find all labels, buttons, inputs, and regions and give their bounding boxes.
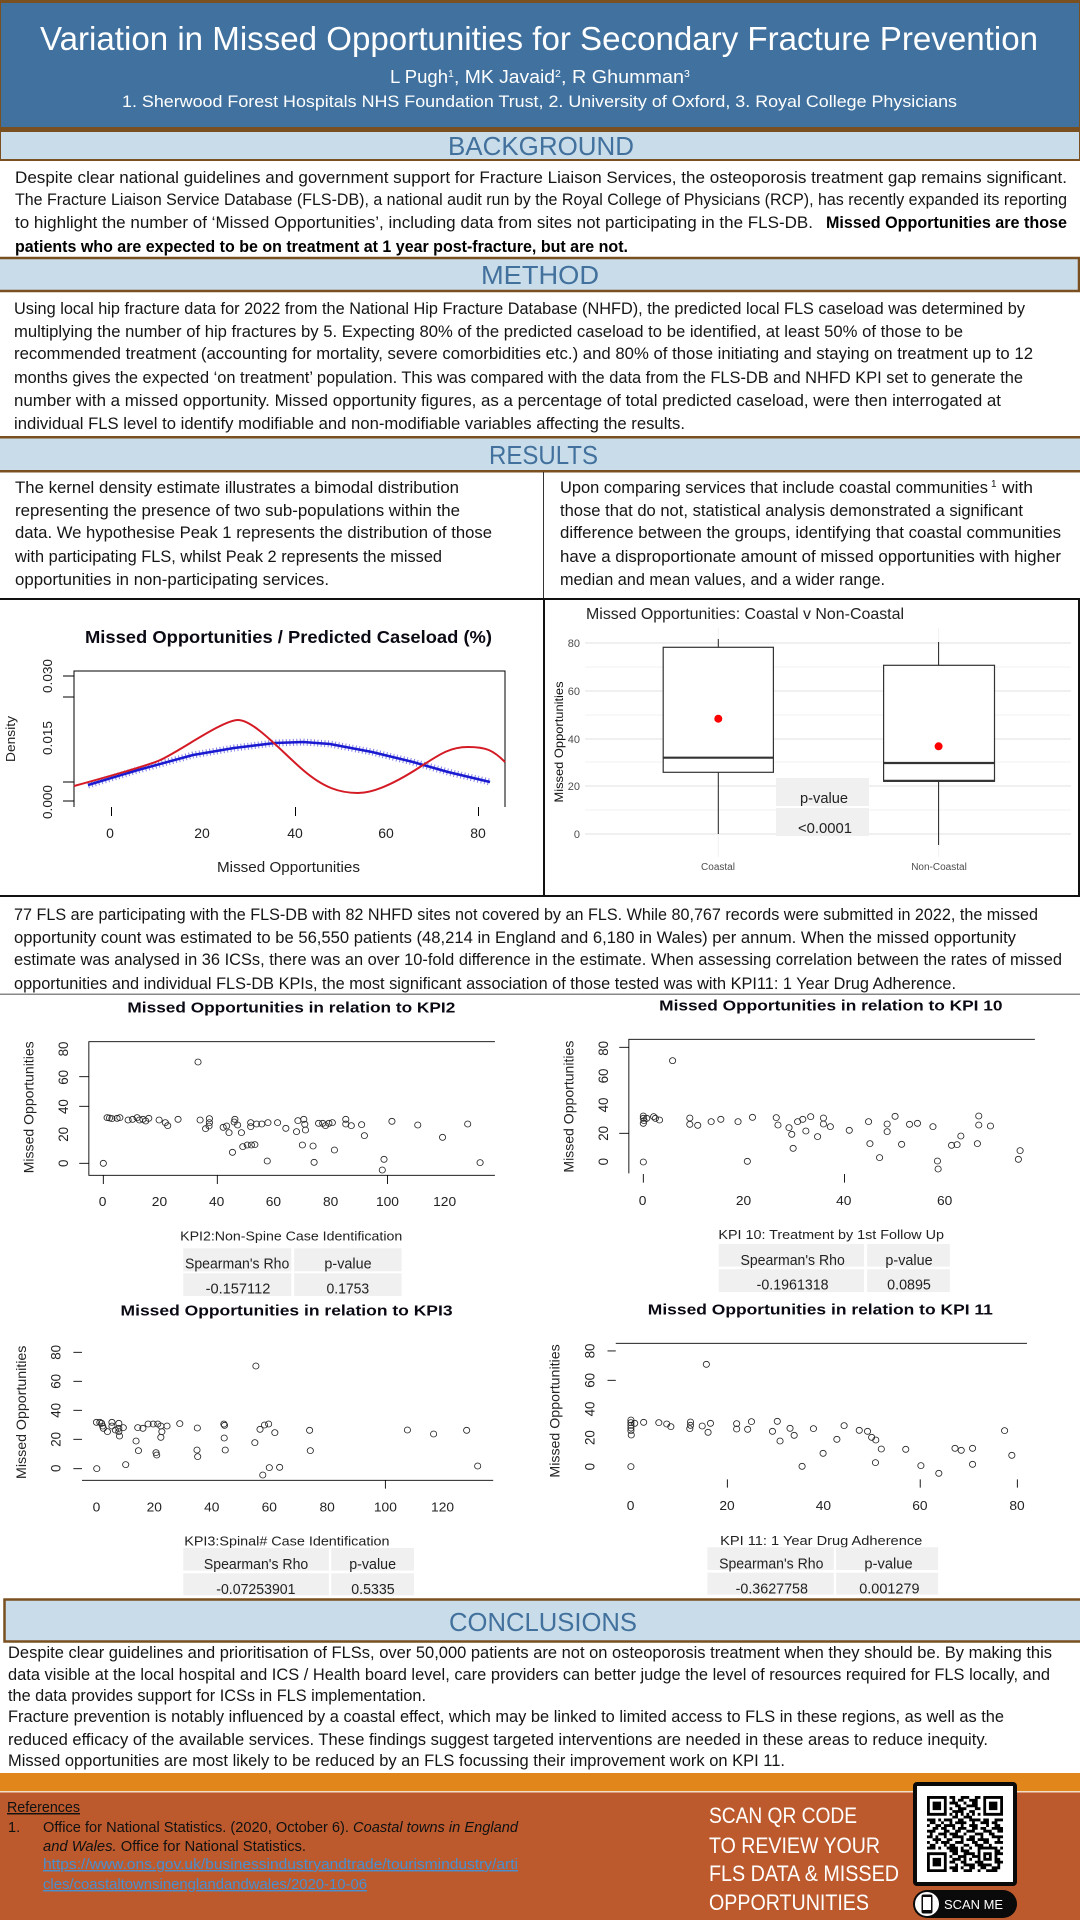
heading: results	[0, 436, 1080, 472]
chart: KPI3 scatter: 0	[93, 1500, 100, 1515]
chart: KPI2 scatter: 20	[152, 1194, 167, 1209]
chart: KPI11 scatter: 0	[627, 1498, 634, 1513]
text block: background: Missed Opportunities are those	[826, 214, 1067, 232]
scan me pill	[913, 1890, 1017, 1918]
chart: kernel density: 80	[470, 825, 486, 841]
text block: results summary	[0, 906, 1080, 995]
references: 1.	[8, 1820, 20, 1836]
text block: results right: 1	[991, 479, 997, 490]
references: References	[7, 1800, 80, 1816]
chart: KPI10 scatter	[561, 998, 1035, 1294]
authors: L Pugh	[390, 67, 448, 87]
chart: kernel density: 20	[194, 825, 210, 841]
table: p-value: <0.0001	[798, 820, 852, 837]
text block: results right: have a disproportionate amount of missed opportunities with higher	[560, 548, 1062, 566]
chart: KPI10 scatter: 40	[836, 1193, 851, 1208]
authors: 1	[448, 68, 454, 80]
chart: KPI11 scatter: 40	[582, 1402, 597, 1416]
heading: results: RESULTS	[489, 440, 598, 470]
table: KPI2 correlation: -0.157112	[206, 1282, 270, 1297]
chart: KPI2 scatter: KPI2:Non-Spine Case Identification	[180, 1229, 402, 1244]
chart: box plot coastal vs non-coastal: 60	[568, 686, 580, 698]
chart: KPI10 scatter: 40	[596, 1098, 611, 1112]
text block: conclusions: Missed opportunities are most likely to be reduced by an FLS focussing their improvement work on KPI 11.	[8, 1752, 785, 1770]
chart: KPI3 scatter: 60	[48, 1374, 64, 1389]
chart: box plot coastal vs non-coastal: Coastal	[701, 862, 735, 873]
chart: KPI3 scatter: 60	[262, 1500, 277, 1515]
chart: kernel density: 0.015	[40, 721, 55, 755]
curve: non-participating estimate (blue)	[88, 742, 490, 785]
text block: method: multiplying the number of hip fractures by 5. Expecting 80% of the predicted caseload to be identified, at least 50% of those to be	[14, 323, 963, 341]
text block: background: patients who are expected to be on treatment at 1 year post-fracture, but are not.	[15, 238, 628, 256]
curve: bimodal density (red)	[74, 720, 505, 793]
chart: box plot coastal vs non-coastal: 0	[574, 829, 580, 841]
chart: KPI11 scatter	[547, 1302, 1027, 1597]
chart title: Missed Opportunities: Coastal v Non-Coastal	[586, 606, 904, 623]
chart: KPI11 scatter: 20	[719, 1498, 735, 1513]
table: KPI3 correlation: -0.07253901	[216, 1582, 295, 1598]
table: KPI2 correlation: 0.1753	[326, 1282, 369, 1297]
authors: , R Ghumman	[561, 67, 684, 87]
text block: method: individual FLS level to identify modifiable and non-modifiable variables affecting the results.	[14, 415, 685, 433]
chart: KPI2 scatter: 0	[56, 1160, 71, 1167]
text block: results summary: opportunities and individual FLS-DB KPIs, the most significant association of those tested was with KPI11: 1 Year Drug Adherence.	[14, 975, 956, 993]
chart: KPI3 scatter: 40	[48, 1403, 64, 1418]
authors	[390, 67, 690, 87]
scan call to action: OPPORTUNITIES	[709, 1890, 869, 1915]
text block: results right	[560, 479, 1062, 589]
box: coastal	[663, 639, 773, 834]
text block: conclusions: the data provides support for ICSs in FLS implementation.	[8, 1687, 426, 1705]
chart title: Missed Opportunities / Predicted Caseload (%)	[85, 627, 492, 647]
chart: kernel density: 0.000	[40, 785, 55, 819]
heading: method: METHOD	[481, 260, 599, 290]
text block: results summary: 77 FLS are participating with the FLS-DB with 82 NHFD sites not covered by an FLS. While 80,767 records were submitted in 2022, the missed	[14, 906, 1038, 924]
chart: KPI3 scatter: 20	[147, 1500, 162, 1515]
chart: KPI3 scatter: KPI3:Spinal# Case Identification	[184, 1534, 390, 1549]
text block: method: number with a missed opportunity. Missed opportunity figures, as a percentage of total predicted caseload, were then interrogated at	[14, 392, 1001, 410]
chart: kernel density: Density	[3, 715, 18, 762]
scatter points	[640, 1058, 1023, 1172]
chart: KPI11 scatter: 80	[1009, 1498, 1025, 1513]
chart: KPI3 scatter: 0	[48, 1465, 64, 1472]
table: KPI2 correlation	[183, 1248, 402, 1297]
chart: KPI10 scatter: 60	[937, 1193, 952, 1208]
chart title: Missed Opportunities in relation to KPI 10	[659, 998, 1003, 1015]
chart: KPI2 scatter: 80	[56, 1042, 71, 1056]
chart: KPI11 scatter: 60	[912, 1498, 928, 1513]
table: KPI11 correlation: Spearman's Rho	[719, 1557, 823, 1572]
scan call to action: FLS DATA & MISSED	[709, 1861, 899, 1886]
text block: conclusions: Despite clear guidelines and prioritisation of FLSs, over 50,000 patients are not on osteoporosis treatment when they should be. By making this	[8, 1644, 1052, 1662]
chart: KPI11 scatter: Missed Opportunities	[547, 1344, 563, 1478]
chart: KPI2 scatter: 100	[376, 1194, 399, 1209]
affiliations: 1. Sherwood Forest Hospitals NHS Foundation Trust, 2. University of Oxford, 3. Royal College Physicians	[122, 93, 957, 111]
text block: conclusions: reduced efficacy of the available services. These findings suggest targeted interventions are needed in these areas to reduce inequity.	[8, 1731, 988, 1749]
authors: 2	[555, 68, 561, 80]
table: KPI10 correlation: Spearman's Rho	[740, 1253, 845, 1269]
text block: results right: with	[1001, 479, 1033, 497]
chart: box plot coastal vs non-coastal: 40	[568, 734, 580, 746]
chart: KPI3 scatter: Missed Opportunities	[14, 1345, 29, 1479]
chart: KPI2 scatter: 120	[433, 1194, 456, 1209]
chart: KPI10 scatter: Missed Opportunities	[561, 1040, 576, 1173]
table: KPI11 correlation: -0.3627758	[736, 1582, 808, 1597]
chart: box plot coastal vs non-coastal: 20	[568, 781, 580, 793]
table: KPI10 correlation: 0.0895	[887, 1278, 931, 1294]
title: Variation in Missed Opportunities for Secondary Fracture Prevention	[40, 20, 1038, 57]
chart: KPI11 scatter: 20	[582, 1430, 597, 1445]
scan call to action: TO REVIEW YOUR	[709, 1833, 880, 1858]
text block: results right: median and mean values, and a wider range.	[560, 571, 885, 589]
chart: KPI10 scatter: 20	[596, 1126, 611, 1141]
text block: results left: representing the presence of two sub-populations within the	[15, 502, 460, 520]
chart: kernel density: 0	[106, 825, 114, 841]
chart title: Missed Opportunities in relation to KPI3	[121, 1303, 453, 1319]
authors: 3	[684, 68, 690, 80]
text block: method: recommended treatment (accounting for mortality, severe comorbidities etc.) and 80% of those initiating and staying on treatment up to 12	[14, 345, 1033, 363]
text block: results left: with participating FLS, whilst Peak 2 represents the missed	[14, 548, 442, 566]
chart: KPI10 scatter: KPI 10: Treatment by 1st Follow Up	[718, 1227, 944, 1242]
text block: background: to highlight the number of ‘Missed Opportunities’, including data from sites not participating in the FLS-DB.	[15, 214, 813, 232]
table: KPI3 correlation: Spearman's Rho	[204, 1557, 308, 1573]
heading: method	[0, 258, 1079, 291]
table: KPI3 correlation	[183, 1548, 414, 1598]
text block: method: months gives the expected ‘on treatment’ population. This was compared with the data from the FLS-DB and NHFD KPI set to generate the	[14, 369, 1023, 387]
chart: kernel density: 0.030	[40, 659, 55, 693]
text block: results summary: opportunity count was estimated to be 56,550 patients (48,214 in England and 6,180 in Wales) per annum. When the missed opportunity	[14, 929, 1017, 947]
chart: KPI3 scatter: 80	[320, 1500, 335, 1515]
chart: KPI11 scatter: 40	[816, 1498, 831, 1513]
table: KPI3 correlation: p-value	[349, 1557, 396, 1573]
chart: KPI10 scatter: 60	[596, 1069, 611, 1083]
chart: kernel density: 40	[287, 825, 303, 841]
box: non-coastal	[884, 642, 994, 845]
text block: results right: those that do not, statistical analysis demonstrated a significant	[560, 502, 1023, 520]
scatter points	[100, 1059, 483, 1173]
table: KPI10 correlation: p-value	[885, 1253, 933, 1269]
chart: KPI3 scatter: 120	[431, 1500, 454, 1515]
chart: KPI10 scatter: 80	[596, 1041, 611, 1056]
chart: KPI2 scatter: Missed Opportunities	[21, 1041, 36, 1173]
references	[7, 1800, 519, 1893]
references: and Wales. Office for National Statistics.	[43, 1839, 306, 1855]
chart: KPI2 scatter: 80	[323, 1194, 338, 1209]
chart: box plot coastal vs non-coastal: 80	[568, 638, 580, 650]
authors: , MK Javaid	[454, 67, 555, 87]
text block: results summary: estimate was analysed in 36 ICSs, there was an over 10-fold difference in the estimate. When assessing correlation between the rates of missed	[14, 951, 1062, 969]
y axis label: Missed Opportunities	[552, 682, 566, 802]
chart: KPI11 scatter: 60	[582, 1373, 597, 1388]
chart: KPI2 scatter: 60	[266, 1194, 281, 1209]
text block: results left: opportunities in non-participating services.	[15, 571, 329, 589]
text block: background: The Fracture Liaison Service Database (FLS-DB), a national audit run by the Royal College of Physicians (RCP), has recently expanded its reporting	[15, 191, 1067, 209]
text block: background	[15, 169, 1067, 256]
chart title: Missed Opportunities in relation to KPI2	[127, 1000, 455, 1017]
table: KPI11 correlation: p-value	[864, 1557, 913, 1572]
text block: method: Using local hip fracture data for 2022 from the National Hip Fracture Database (NHFD), the predicted local FLS caseload was determined by	[14, 300, 1026, 318]
chart: KPI10 scatter: 0	[596, 1158, 611, 1165]
chart: KPI11 scatter: KPI 11: 1 Year Drug Adherence	[720, 1533, 922, 1548]
text block: conclusions: data visible at the local hospital and ICS / Health board level, care providers can better judge the level of resources required for FLS locally, and	[8, 1666, 1050, 1684]
table: KPI2 correlation: Spearman's Rho	[185, 1257, 289, 1273]
scan call to action: SCAN QR CODE	[709, 1803, 857, 1828]
table: p-value: p-value	[800, 790, 848, 807]
text block: method	[14, 300, 1033, 433]
text block: results left: The kernel density estimate illustrates a bimodal distribution	[15, 479, 459, 497]
text block: results right: difference between the groups, identifying that coastal communities	[560, 524, 1061, 542]
chart: KPI10 scatter: 20	[736, 1193, 751, 1208]
chart: KPI3 scatter: 80	[48, 1345, 64, 1360]
chart title: Missed Opportunities in relation to KPI 11	[648, 1302, 993, 1318]
panel frame: charts	[0, 472, 1080, 897]
heading: conclusions: CONCLUSIONS	[449, 1607, 637, 1637]
chart: KPI2 scatter: 60	[56, 1070, 71, 1085]
scatter points	[628, 1361, 1015, 1476]
chart: KPI3 scatter: 20	[48, 1432, 64, 1447]
footer panel	[0, 1773, 1080, 1920]
heading: background: BACKGROUND	[448, 131, 634, 161]
chart: box plot coastal vs non-coastal	[552, 606, 1071, 873]
chart: KPI3 scatter: 100	[374, 1500, 397, 1515]
table: KPI3 correlation: 0.5335	[351, 1582, 395, 1598]
chart: KPI2 scatter	[21, 1000, 495, 1297]
references: cles/coastaltownsinenglandandwales/2020-10-06	[43, 1877, 367, 1893]
chart: box plot coastal vs non-coastal: Non-Coastal	[911, 862, 967, 873]
icon: QR code	[913, 1782, 1017, 1886]
text block: results left: data. We hypothesise Peak 1 represents the distribution of those	[15, 524, 492, 542]
chart: KPI2 scatter: 40	[209, 1194, 224, 1209]
chart: KPI3 scatter	[14, 1303, 493, 1598]
chart: KPI2 scatter: 0	[99, 1194, 106, 1209]
chart: KPI2 scatter: 20	[56, 1127, 71, 1142]
chart: kernel density	[3, 627, 505, 876]
chart: KPI11 scatter: 80	[582, 1344, 597, 1358]
table: KPI10 correlation	[719, 1244, 950, 1294]
text block: results right: Upon comparing services that include coastal communities	[560, 479, 988, 497]
references: https://www.ons.gov.uk/businessindustryandtrade/tourismindustry/arti	[43, 1857, 518, 1873]
text block: conclusions: Fracture prevention is notably influenced by a coastal effect, which may be linked to limited access to FLS in these regions, as well as the	[8, 1708, 1004, 1726]
table: p-value	[776, 778, 869, 837]
chart: KPI11 scatter: 0	[582, 1463, 597, 1470]
heading: background	[0, 131, 1080, 161]
scan me pill: SCAN ME	[944, 1897, 1003, 1912]
table: KPI2 correlation: p-value	[324, 1257, 372, 1273]
heading: conclusions	[4, 1600, 1080, 1642]
references: Office for National Statistics. (2020, October 6). Coastal towns in England	[43, 1820, 519, 1836]
axis label: Missed Opportunities	[217, 859, 360, 876]
header banner	[0, 0, 1080, 130]
chart: KPI2 scatter: 40	[56, 1099, 71, 1114]
scan call to action	[709, 1803, 899, 1915]
chart: KPI10 scatter: 0	[639, 1193, 646, 1208]
text block: conclusions	[8, 1644, 1052, 1770]
text block: background: Despite clear national guidelines and government support for Fracture Liaison Services, the osteoporosis treatment gap remains significant.	[15, 169, 1067, 187]
text block: results left	[14, 479, 492, 589]
table: KPI10 correlation: -0.1961318	[757, 1278, 829, 1294]
table: KPI11 correlation: 0.001279	[859, 1582, 920, 1597]
chart: KPI3 scatter: 40	[204, 1500, 219, 1515]
scatter points	[93, 1363, 481, 1478]
table: KPI11 correlation	[707, 1547, 938, 1597]
chart: kernel density: 60	[378, 825, 394, 841]
